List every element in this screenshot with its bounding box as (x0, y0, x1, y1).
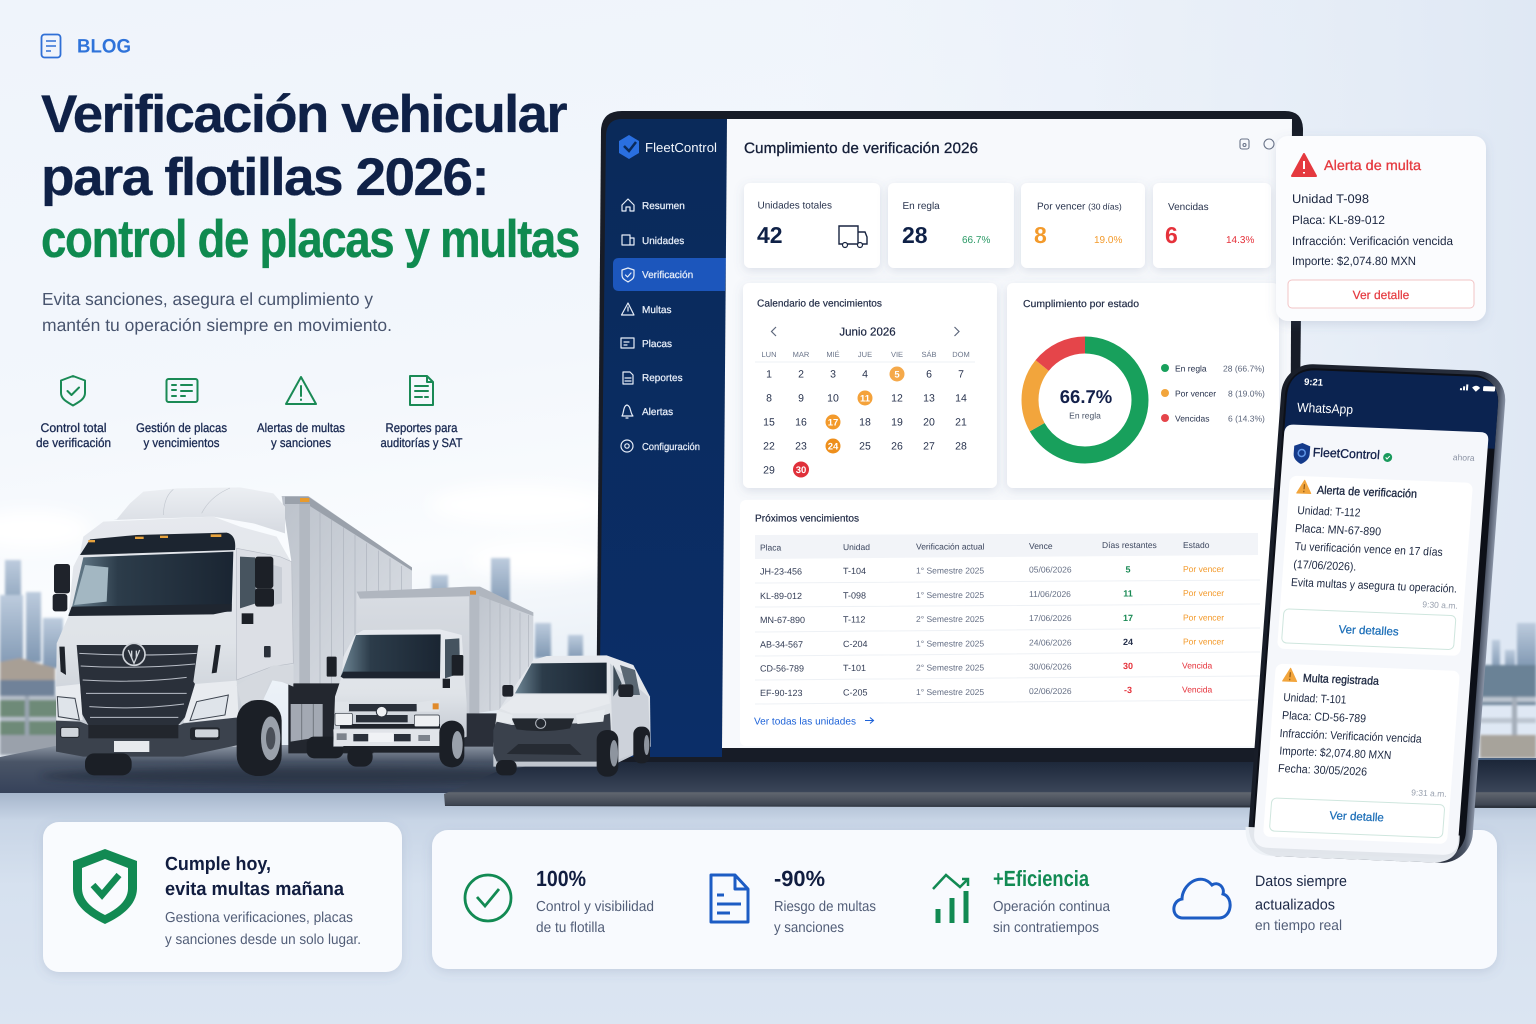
background sky (0, 0, 1536, 800)
card: cumple hoy: Cumple hoy, (165, 854, 271, 875)
dashboard main panel (722, 119, 1292, 748)
feature: gestión de placas (136, 379, 227, 450)
calendar panel: 19 (891, 416, 903, 428)
button: ver detalle: Ver detalle (1329, 810, 1384, 824)
upcoming expirations table: 2° Semestre 2025 (916, 614, 984, 624)
donut chart: 66.7% (1060, 386, 1112, 407)
upcoming expirations table: 11 (1123, 588, 1133, 598)
calendar panel: 30 (796, 465, 806, 476)
benefit: -90% (711, 866, 876, 936)
nav: Resumen: Resumen (642, 201, 685, 212)
visor (80, 533, 235, 555)
laptop base (444, 760, 1536, 808)
KPI: En regla: En regla (902, 201, 940, 212)
calendar panel: DOM (952, 350, 970, 359)
card: cumple hoy: y sanciones desde un solo lugar. (165, 932, 361, 948)
bumper (56, 717, 238, 757)
calendar panel: 18 (859, 416, 871, 428)
cab body (56, 517, 293, 747)
calendar panel: MIÉ (826, 350, 840, 359)
benefit: datos en la nube: en tiempo real (1255, 918, 1342, 934)
benefit: 100% (465, 866, 654, 936)
upcoming expirations table: 17 (1123, 613, 1133, 623)
upcoming expirations table: Verificación actual (916, 542, 985, 552)
message card: alerta de verificación: Alerta de verificación (1317, 485, 1417, 501)
grille (348, 704, 417, 711)
KPI: Por vencer (1021, 183, 1145, 268)
nav: Reportes: Reportes (642, 373, 683, 384)
upcoming expirations table: T-098 (843, 590, 866, 600)
nav: Configuración (621, 440, 700, 453)
benefit: +eficiencia: sin contratiempos (993, 920, 1099, 936)
upcoming expirations table: EF-90-123 (760, 688, 803, 698)
benefit: datos en la nube: Datos siempre (1255, 873, 1347, 890)
calendar panel: SÁB (921, 350, 937, 359)
upcoming expirations table: 17/06/2026 (1029, 613, 1072, 623)
KPI: En regla: 66.7% (962, 235, 990, 246)
title: control de placas y multas (41, 210, 579, 269)
feature: reportes (380, 376, 463, 450)
message card: alerta de verificación: (17/06/2026). (1293, 559, 1357, 574)
upcoming expirations table: C-205 (843, 688, 868, 698)
trailer (282, 496, 412, 687)
wheels (347, 747, 373, 767)
message card: multa registrada: Fecha: 30/05/2026 (1278, 763, 1367, 779)
calendar panel: 23 (795, 440, 807, 452)
nav: Placas: Placas (642, 339, 672, 350)
upcoming expirations table: 24/06/2026 (1029, 638, 1072, 648)
nav: Alertas (622, 405, 673, 418)
alert card: multa: Infracción: Verificación vencida (1292, 234, 1453, 248)
calendar panel: 6 (926, 368, 932, 380)
roof fairing (113, 487, 285, 533)
bottom band (0, 793, 1536, 1024)
KPI: Por vencer: Por vencer (30 días) (1037, 202, 1122, 212)
upcoming expirations table: T-101 (843, 663, 866, 673)
calendar panel: 22 (763, 440, 775, 452)
donut legend: En regla (1175, 364, 1207, 374)
benefit: 100%: 100% (536, 866, 586, 891)
header: blog label (42, 34, 131, 58)
lower corners (56, 684, 83, 721)
upcoming expirations table: -3 (1124, 685, 1132, 695)
bumper (333, 729, 441, 746)
dashboard sidebar (599, 119, 727, 757)
calendar panel: 2 (798, 368, 804, 380)
city skyline (0, 558, 1536, 758)
subtitle (42, 289, 392, 335)
calendar panel: 15 (763, 416, 775, 428)
calendar panel: 3 (830, 368, 836, 380)
button: ver detalle: Ver detalle (1353, 288, 1410, 302)
nav: Alertas: Alertas (642, 407, 673, 418)
upcoming expirations table: 1° Semestre 2025 (916, 638, 984, 648)
title: Verificación vehicular (41, 85, 567, 144)
calendar panel: 5 (894, 370, 900, 380)
donut legend: Por vencer (1175, 388, 1216, 398)
calendar panel: 26 (891, 440, 903, 452)
feature: control total (36, 376, 111, 450)
nav: Reportes (623, 372, 683, 384)
nav: Multas (622, 303, 671, 316)
benefit: datos en la nube (1174, 873, 1347, 934)
logo FleetControl: FleetControl (645, 140, 717, 155)
calendar panel: JUE (858, 350, 872, 359)
message card: multa registrada: Importe: $2,074.80 MXN (1279, 746, 1392, 762)
calendar panel: 25 (859, 440, 871, 452)
nav: Verificación (622, 268, 693, 282)
message card: alerta de verificación: Placa: MN-67-890 (1295, 523, 1381, 538)
upcoming expirations table: Vencida (1182, 684, 1213, 694)
phone app title: WhatsApp (1297, 400, 1354, 417)
KPI: En regla (888, 183, 1014, 268)
feature: control total: Control total (40, 421, 106, 435)
donut legend (1161, 364, 1265, 424)
upcoming expirations table: 05/06/2026 (1029, 564, 1072, 574)
upcoming expirations table: Unidad (843, 542, 870, 552)
calendar panel: 11 (860, 394, 871, 404)
logo FleetControl (619, 135, 717, 159)
KPI: Vencidas: 14.3% (1226, 235, 1254, 246)
card: benefits strip (432, 830, 1497, 969)
laptop screen frame (596, 111, 1303, 762)
benefit: +eficiencia: +Eficiencia (993, 866, 1090, 891)
KPI: En regla: 28 (902, 222, 928, 248)
icon: shield (73, 849, 137, 924)
alert card: multa (1276, 136, 1486, 321)
icon: warning (1292, 154, 1316, 176)
compliance by state donut panel: Cumplimiento por estado (1023, 299, 1139, 310)
upcoming expirations table: AB-34-567 (760, 640, 803, 650)
nav: Verificación: Verificación (642, 270, 693, 281)
calendar panel: 28 (955, 440, 967, 452)
van (493, 655, 651, 777)
calendar panel: 13 (923, 392, 935, 404)
alert card: multa: Unidad T-098 (1292, 192, 1369, 206)
calendar panel: 4 (862, 368, 868, 380)
KPI: Vencidas: Vencidas (1168, 202, 1209, 213)
upcoming expirations table: Por vencer (1183, 612, 1224, 622)
upcoming expirations table: 11/06/2026 (1029, 589, 1071, 599)
card: cumple hoy: Gestiona verificaciones, placas (165, 910, 353, 926)
calendar panel: VIE (891, 350, 903, 359)
message card: multa registrada: Multa registrada (1302, 673, 1380, 688)
KPI: Unidades totales: Unidades totales (758, 200, 832, 212)
vehicle shadows (40, 767, 620, 785)
header: blog label: BLOG (77, 36, 131, 58)
calendar panel: 16 (795, 416, 807, 428)
calendar panel: 1 (766, 368, 772, 380)
calendar panel: Calendario de vencimientos (757, 298, 882, 310)
upcoming expirations table (740, 500, 1286, 746)
benefit: -90%: y sanciones (774, 920, 844, 936)
wheels (496, 760, 517, 775)
upcoming expirations table: 02/06/2026 (1029, 686, 1072, 696)
road (0, 745, 700, 793)
upcoming expirations table: Por vencer (1183, 588, 1224, 598)
phone status bar: 9:21 (1304, 377, 1324, 389)
calendar panel: Junio 2026 (839, 326, 896, 338)
KPI: Por vencer: 19.0% (1094, 235, 1122, 246)
calendar panel: 20 (923, 416, 935, 428)
calendar panel: 14 (955, 392, 967, 404)
button: ver detalles: Ver detalles (1338, 624, 1399, 638)
calendar panel: 8 (766, 392, 772, 404)
message card: alerta de verificación: Evita multas y asegura tu operación. (1291, 577, 1457, 596)
button: ver detalles (1281, 609, 1456, 650)
wheels (85, 753, 132, 775)
calendar panel: 24 (828, 442, 839, 452)
button: ver detalle (1269, 798, 1445, 838)
nav: Resumen (622, 199, 685, 212)
grille (77, 645, 198, 725)
windshield (68, 552, 233, 615)
upcoming expirations table: 2° Semestre 2025 (916, 662, 984, 672)
feature: reportes: Reportes para (386, 421, 458, 435)
upcoming expirations table: 30 (1123, 661, 1133, 671)
benefit: -90%: -90% (774, 866, 825, 891)
chat header: FleetControl (1312, 445, 1380, 462)
message card: multa registrada: Unidad: T-101 (1283, 692, 1347, 707)
upcoming expirations table: Vence (1029, 541, 1053, 551)
chat header (1293, 443, 1475, 471)
upcoming expirations table: T-112 (843, 614, 865, 624)
button: ver detalle (1288, 280, 1474, 308)
calendar panel (743, 283, 997, 488)
alert card: multa: Alerta de multa (1324, 157, 1421, 173)
phone status bar (1304, 377, 1495, 396)
message card: multa registrada: Infracción: Verificación vencida (1279, 728, 1423, 746)
upcoming expirations table: 1° Semestre 2025 (916, 687, 984, 697)
KPI: Por vencer: 8 (1034, 222, 1047, 248)
nav: Unidades (622, 235, 684, 247)
truck: large tractor-trailer (53, 487, 412, 776)
message card: alerta de verificación: Tu verificación vence en 17 días (1294, 541, 1443, 559)
link: Ver todas las unidades: Ver todas las unidades (754, 716, 856, 728)
door (237, 548, 293, 680)
dashboard heading: Cumplimiento de verificación 2026 (744, 140, 978, 157)
benefit: -90%: Riesgo de multas (774, 899, 876, 915)
calendar panel: MAR (793, 350, 810, 359)
donut legend: 28 (66.7%) (1223, 364, 1265, 374)
upcoming expirations table: Por vencer (1183, 636, 1224, 646)
benefit: +eficiencia (933, 866, 1111, 936)
upcoming expirations table: Por vencer (1183, 564, 1224, 574)
upcoming expirations table: Placa (760, 542, 782, 552)
upcoming expirations table: C-204 (843, 639, 868, 649)
nav: Unidades: Unidades (642, 236, 684, 247)
fender (237, 665, 293, 715)
benefit: 100%: de tu flotilla (536, 920, 606, 936)
headlights (335, 702, 349, 712)
donut chart (1030, 345, 1140, 455)
upcoming expirations table: Días restantes (1102, 540, 1157, 550)
upcoming expirations table: 1° Semestre 2025 (916, 590, 984, 600)
upcoming expirations table: 1° Semestre 2025 (916, 566, 984, 576)
title (41, 85, 579, 269)
calendar panel: 27 (923, 440, 935, 452)
feature: control total: de verificación (36, 436, 111, 450)
upcoming expirations table: 24 (1123, 637, 1133, 647)
upcoming expirations table: JH-23-456 (760, 566, 802, 576)
message card: alerta de verificación: 9:30 a.m. (1422, 599, 1458, 611)
upcoming expirations table: 30/06/2026 (1029, 662, 1072, 672)
feature: alertas de multas: y sanciones (271, 436, 331, 450)
subtitle: Evita sanciones, asegura el cumplimiento y (42, 289, 373, 309)
nav: Configuración: Configuración (642, 442, 700, 453)
calendar panel: 12 (891, 392, 903, 404)
card: cumple hoy (43, 822, 402, 972)
donut chart: En regla (1069, 410, 1101, 420)
feature: reportes: auditorías y SAT (380, 436, 463, 450)
message card: alerta de verificación: Unidad: T-112 (1297, 505, 1361, 520)
calendar panel: 9 (798, 392, 804, 404)
alert card: multa: Placa: KL-89-012 (1292, 213, 1385, 227)
feature: alertas de multas: Alertas de multas (257, 421, 345, 435)
feature: gestión de placas: Gestión de placas (136, 421, 227, 435)
calendar panel: 21 (955, 416, 967, 428)
lower fascia (493, 713, 612, 762)
upcoming expirations table: Próximos vencimientos (755, 514, 859, 524)
KPI: Unidades totales (744, 183, 880, 268)
upcoming expirations table: 5 (1125, 564, 1131, 574)
calendar panel: 7 (958, 368, 964, 380)
truck: medium box truck (327, 587, 533, 767)
upcoming expirations table: KL-89-012 (760, 591, 802, 601)
alert card: multa: Importe: $2,074.80 MXN (1292, 254, 1416, 268)
upcoming expirations table: Estado (1183, 540, 1210, 550)
compliance by state donut panel (1007, 283, 1279, 488)
nav: Multas: Multas (642, 305, 671, 316)
chat header: ahora (1453, 452, 1475, 463)
card: cumple hoy: evita multas mañana (165, 879, 344, 900)
KPI: Vencidas (1153, 183, 1271, 268)
active nav item highlight (613, 258, 726, 291)
phone bottom glass lip (1244, 827, 1460, 863)
message card: multa registrada (1263, 664, 1460, 844)
toolbar icons (1240, 139, 1274, 149)
calendar panel: LUN (761, 350, 777, 359)
benefit: 100%: Control y visibilidad (536, 899, 654, 915)
donut legend: 8 (19.0%) (1228, 388, 1265, 398)
upcoming expirations table: CD-56-789 (760, 664, 804, 674)
KPI: Vencidas: 6 (1165, 222, 1178, 248)
benefit: +eficiencia: Operación continua (993, 899, 1111, 915)
upcoming expirations table: T-104 (843, 566, 866, 576)
phone (1244, 363, 1507, 864)
side window (240, 557, 256, 608)
benefit: datos en la nube: actualizados (1255, 896, 1335, 914)
calendar panel: 17 (828, 418, 838, 428)
message card: multa registrada: Placa: CD-56-789 (1282, 710, 1366, 725)
subtitle: mantén tu operación siempre en movimiento. (42, 315, 392, 335)
nav: Placas (621, 338, 672, 350)
donut legend: 6 (14.3%) (1228, 414, 1265, 424)
title: para flotillas 2026: (41, 148, 488, 207)
donut legend: Vencidas (1175, 414, 1210, 424)
upcoming expirations table: Vencida (1182, 660, 1213, 670)
message card: multa registrada: 9:31 a.m. (1411, 787, 1447, 799)
message card: alerta de verificación (1277, 476, 1473, 656)
feature: alertas de multas (257, 377, 345, 450)
cab body (333, 629, 467, 747)
calendar panel: 10 (827, 392, 839, 404)
calendar panel: 29 (763, 464, 775, 476)
feature: gestión de placas: y vencimientos (144, 436, 220, 450)
KPI: Unidades totales: 42 (757, 222, 783, 248)
upcoming expirations table: MN-67-890 (760, 615, 805, 625)
